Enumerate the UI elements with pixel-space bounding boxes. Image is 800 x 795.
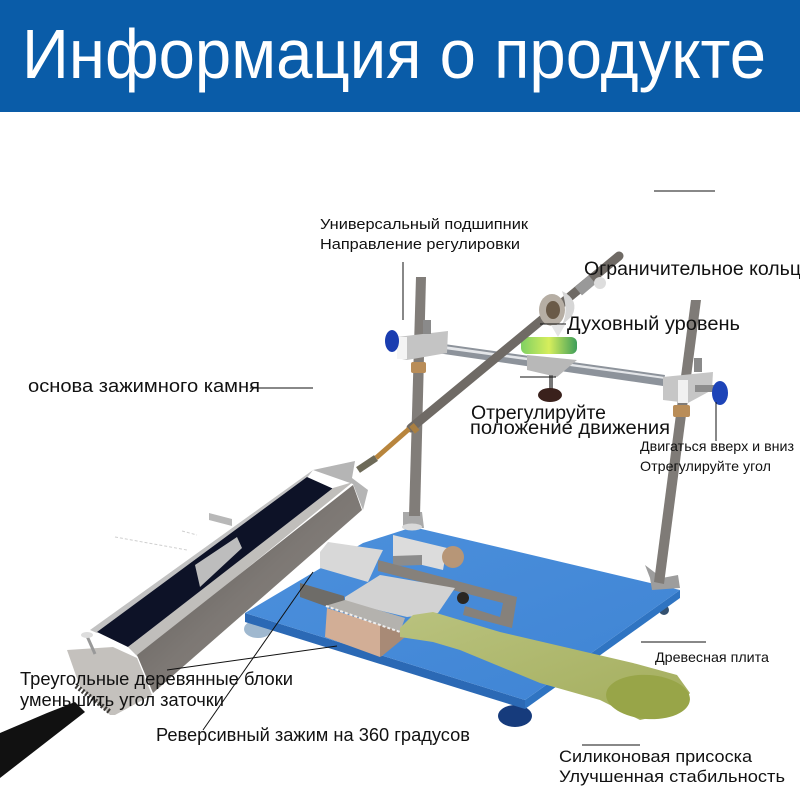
tan knob	[442, 546, 464, 568]
label: reversible clamp: Реверсивный зажим на 360 градусов	[156, 725, 470, 745]
rail and clamp assembly on the plate	[320, 535, 517, 628]
spring thread	[76, 686, 110, 712]
wing nuts	[402, 512, 680, 590]
label: universal bearing: Универсальный подшипник	[320, 216, 528, 233]
title: Информация о продукте	[22, 15, 766, 93]
lower clamp	[345, 575, 455, 617]
label: wooden blocks: Треугольные деревянные блоки	[20, 669, 293, 689]
label: adjust position: положение движения	[470, 418, 670, 439]
guide rod with brass end	[358, 256, 619, 470]
product illustration: sharpener	[0, 256, 728, 778]
right clamp block	[663, 358, 717, 403]
label on stone	[195, 537, 242, 587]
brass collars	[411, 362, 690, 417]
label: move up and down: Двигаться вверх и вниз	[640, 438, 794, 454]
label: wooden blocks	[20, 669, 293, 710]
label: move up and down	[640, 438, 794, 474]
black handle	[0, 702, 85, 778]
wooden block	[325, 608, 410, 657]
left blue knob	[385, 330, 399, 352]
label: adjust position: Отрегулируйте	[471, 403, 606, 424]
grey stone face	[137, 485, 362, 693]
label: move up and down: Отрегулируйте угол	[640, 458, 771, 474]
paper reflection behind knife	[115, 531, 197, 550]
near end block	[67, 647, 152, 715]
label: wood plate: Древесная плита	[655, 649, 769, 665]
screw	[81, 632, 95, 654]
small wheel	[457, 592, 469, 604]
black stone	[97, 477, 336, 647]
label: wooden blocks: уменьшить угол заточки	[20, 690, 224, 710]
base plate	[245, 527, 680, 709]
label: silicone suction cup: Улучшенная стабильность	[559, 767, 785, 786]
sharpening stone holder	[0, 461, 368, 778]
label: universal bearing: Направление регулировки	[320, 236, 520, 253]
label: silicone suction cup	[559, 747, 785, 786]
limit ring	[575, 275, 606, 295]
silver strip	[128, 482, 353, 657]
label: limit ring: Ограничительное кольц	[584, 259, 800, 280]
label: spirit level: Духовный уровень	[567, 314, 740, 335]
left clamp block	[397, 320, 448, 360]
rear block	[393, 535, 447, 570]
upper carrier block	[320, 542, 383, 582]
label: adjust position	[470, 403, 670, 439]
green knife handle	[400, 612, 691, 722]
header banner	[0, 0, 800, 112]
universal bearing	[539, 291, 574, 337]
far blade bar	[209, 513, 232, 526]
label: silicone suction cup: Силиконовая присоска	[559, 747, 753, 766]
bolt	[393, 555, 422, 566]
cross bar	[437, 343, 665, 386]
knife blade	[300, 583, 405, 632]
right blue knob	[712, 381, 728, 405]
far rail	[90, 470, 313, 633]
label: universal bearing	[320, 216, 528, 253]
leader lines	[167, 191, 716, 745]
label: stone clamp base: основа зажимного камня	[28, 376, 260, 396]
steel frame	[378, 560, 517, 628]
far end bracket	[313, 461, 368, 510]
vertical threaded posts	[409, 277, 701, 584]
suction feet	[244, 605, 669, 727]
spirit level	[521, 337, 577, 402]
